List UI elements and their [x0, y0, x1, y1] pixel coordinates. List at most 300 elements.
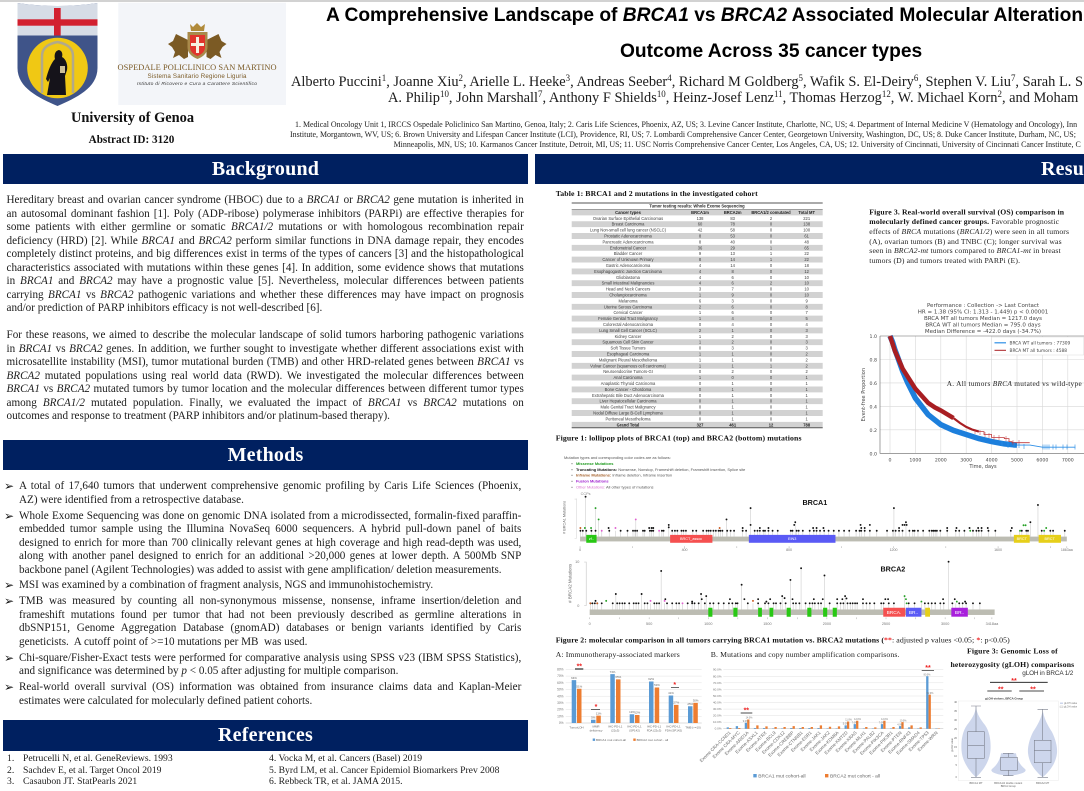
category labels: Exome-ATRX — [745, 730, 768, 753]
table: BRCA mutations by cancer type: 3 — [699, 287, 702, 292]
table: BRCA mutations by cancer type: 78 — [730, 222, 736, 227]
category labels: Exome-ESR1 — [790, 730, 813, 753]
bullet list: methods: estimates were calculated for molecularly defined patient cohorts. — [19, 695, 312, 707]
category labels: Exome-WRN — [917, 730, 939, 752]
chart: mutations and copy number amplification — [699, 665, 943, 780]
table: BRCA mutations by cancer type: 1 — [806, 393, 809, 398]
logo: University of Genoa shield — [18, 3, 98, 106]
domains: BRCT — [1045, 537, 1055, 541]
chart: BRCA1 lollipop plot: 1863aa — [1061, 548, 1073, 552]
category labels: Exome-KDM6A — [814, 730, 840, 756]
table: BRCA mutations by cancer type: BRCA1/2 comutated — [751, 210, 791, 215]
value labels: 25% — [687, 702, 694, 706]
chart title: BRCA MT all tumors Median = 1217.0 days — [924, 316, 1042, 322]
legend: mutation types: Fusion Mutations — [576, 479, 609, 484]
table: BRCA mutations by cancer type: 2 — [732, 369, 735, 374]
table: BRCA mutations by cancer type: Pancreatic Adenocarcinoma — [603, 239, 654, 244]
table: BRCA mutations by cancer type: 61 — [804, 234, 810, 238]
axis labels — [861, 334, 1074, 470]
table: BRCA mutations by cancer type: 1 — [806, 381, 809, 386]
table: BRCA mutations by cancer type: 1 — [699, 292, 702, 298]
table: BRCA mutations by cancer type: 0 — [770, 298, 773, 303]
category labels: Exome-BCL9 — [754, 730, 777, 753]
y axis: 30% — [557, 701, 564, 705]
bullet list: methods: AZ) were identified from a retrospective database. — [19, 494, 244, 506]
figure 3 caption: overall survival: effects of BRCA mutations (BRCA1/2) were seen in all tumors — [869, 227, 1069, 236]
table: BRCA mutations by cancer type: 10 — [804, 281, 810, 286]
table: BRCA mutations by cancer type: 8 — [699, 239, 702, 244]
bullet list: methods: along with another panel designed to enrich for an additional >20,000 genes at lower depth. A 500Mb SNP — [19, 550, 521, 562]
heading: background: Background — [212, 158, 319, 180]
table: BRCA mutations by cancer type: Nodal Diffuse Large B-Cell Lymphoma — [593, 410, 664, 416]
chart: BRCA2 lollipop plot: 3000 — [941, 622, 949, 626]
table: BRCA mutations by cancer type: 14 — [730, 257, 736, 262]
stems — [580, 497, 1065, 537]
table: BRCA mutations by cancer type: 0 — [699, 399, 702, 404]
table: BRCA mutations by cancer type: 3 — [806, 334, 809, 339]
table: BRCA mutations by cancer type: 2 — [732, 340, 735, 345]
value labels: 13% — [629, 710, 635, 714]
table: BRCA mutations by cancer type: 1 — [806, 399, 809, 404]
value labels — [571, 670, 699, 719]
legend: mutation types: Other Mutations: All other types of mutations — [576, 485, 654, 490]
chart: BRCA2 lollipop plot: 3418aa — [986, 622, 999, 626]
chart: immunotherapy-associated markers — [557, 664, 702, 742]
table: BRCA mutations by cancer type: Kidney Cancer — [615, 334, 642, 339]
legend: mutation types: Missense Mutations — [576, 461, 614, 466]
table: BRCA mutations by cancer type: 1 — [732, 363, 735, 368]
table: BRCA mutations by cancer type: Soft Tissue Tumors — [610, 346, 646, 351]
chart B heading: B. Mutations and copy number amplification comparisons. — [711, 650, 899, 659]
panel: references — [3, 720, 528, 787]
category labels: Exome-RNF43 — [887, 730, 912, 755]
table: BRCA mutations by cancer type: 0 — [770, 352, 773, 356]
table: BRCA mutations by cancer type: 1 — [806, 387, 809, 392]
category labels: Exome-SMAD4 — [895, 730, 921, 756]
reference list: 1. — [7, 753, 14, 764]
table: BRCA mutations by cancer type: 1 — [732, 410, 735, 416]
chart: BRCA2 lollipop plot: 0 — [577, 604, 579, 608]
table: BRCA mutations by cancer type: 1 — [806, 410, 809, 416]
chart legend — [1060, 702, 1078, 708]
figure 3 caption: overall survival: Figure 3. Real-world overall survival (OS) comparison in — [869, 208, 1065, 217]
axis labels: 0.4 — [870, 404, 877, 410]
table: BRCA mutations by cancer type: 0 — [770, 381, 773, 386]
axis labels: 40 — [954, 700, 958, 704]
chart: immunotherapy-associated markers: * — [673, 682, 676, 689]
value labels: 5% — [591, 715, 596, 719]
table: BRCA mutations by cancer type: 1 — [732, 357, 735, 362]
title line 1: A Comprehensive Landscape of BRCA1 vs BRCA2 Associated Molecular Alteration — [326, 5, 1083, 26]
table: BRCA mutations by cancer type: 10 — [804, 292, 810, 298]
value labels: 12.0% — [854, 718, 862, 721]
table: BRCA mutations by cancer type: 42 — [698, 228, 703, 233]
chart legend: gLOH value — [1064, 702, 1078, 705]
table: BRCA mutations by cancer type: 1 — [732, 381, 735, 386]
table: BRCA mutations by cancer type: 0 — [770, 222, 773, 227]
y axis: 50.0% — [713, 694, 722, 698]
value labels: 11% — [596, 711, 602, 715]
table: BRCA mutations by cancer type: Small Intestinal Malignancies — [602, 281, 654, 286]
category labels: TumorLOH — [569, 726, 584, 730]
table: BRCA mutations by cancer type: 3 — [806, 340, 809, 345]
table: BRCA mutations by cancer type: 2 — [770, 216, 773, 221]
category labels: Exome-ASXL1 — [734, 730, 759, 755]
chart title — [918, 303, 1048, 335]
abstract id: Abstract ID: 3120 — [89, 134, 174, 146]
table: BRCA mutations by cancer type: 29 — [730, 245, 736, 250]
reference list: 6. Rebbeck TR, et al. JAMA 2015. — [269, 776, 402, 787]
table: BRCA mutations by cancer type: Bone Cancer - Chordoma — [605, 387, 652, 392]
stems — [590, 562, 980, 609]
table: BRCA mutations by cancer type: Liver Hepatocellular Carcinoma — [599, 399, 657, 404]
value labels: 12% — [634, 711, 641, 715]
axis labels: BRCA1 MT — [969, 781, 983, 785]
table: BRCA mutations by cancer type: 0 — [699, 369, 702, 374]
bullet list: methods: A total of 17,640 tumors that underwent comprehensive genomic profiling by Caris Life Sciences (Phoenix, — [19, 480, 521, 492]
table: BRCA mutations by cancer type: Anaplastic Thyroid Carcinoma — [601, 381, 656, 386]
axis labels: 1000 — [909, 458, 921, 464]
text block: background paragraph 1: deficiency (HRD) [2]. While BRCA1 and BRCA2 perform similar functions in DNA damage repair, they encodes — [6, 235, 524, 247]
bullet list: methods: TMB was measured by counting all non-synonymous missense, nonsense, inframe insertion/deletion and — [19, 595, 521, 607]
y axis: 60% — [557, 681, 564, 685]
table: BRCA mutations by cancer type: Head and Neck Cancers — [606, 287, 650, 292]
figure 1 title: Figure 1: lollipop plots of BRCA1 (top) and BRCA2 (bottom) mutations — [556, 433, 802, 442]
table: BRCA mutations by cancer type: 6 — [732, 281, 735, 286]
value labels: 65% — [615, 675, 622, 679]
table: BRCA mutations by cancer type: 138 — [803, 222, 811, 227]
heading: background — [3, 154, 528, 184]
domains — [708, 608, 968, 617]
text block: background paragraph 2: in BRCA1 vs BRCA2 genes. In addition, we further sought to investigate whether different associations exist with — [6, 343, 524, 355]
category labels: IHC-PD-L1 — [608, 724, 623, 728]
y axis: 90.0% — [713, 668, 722, 672]
y axis: 60.0% — [713, 687, 722, 691]
figure 2 title: Figure 2: molecular comparison in all tumors carrying BRCA1 mutation vs. BRCA2 mutations (**: adjusted p values <0.05; *: p<0.05) — [556, 636, 1010, 644]
affiliations line 1: 1. Medical Oncology Unit 1, IRCCS Ospedale Policlinico San Martino, Genoa, Italy; 2. Caris Life Sciences, Phoenix, AZ, US; 3. Levine Cancer Institute, Charlotte, NC, US; 4. Department of Internal Medicine V (Hematology and Oncology), Inn — [295, 120, 1077, 129]
heading: references — [3, 720, 528, 751]
axis labels: 20 — [954, 736, 958, 740]
table: BRCA mutations by cancer type: 2 — [732, 334, 735, 339]
chart: gLOH violin plot — [950, 670, 1078, 788]
table: BRCA mutations by cancer type: 3 — [732, 298, 735, 303]
value labels: 41% — [668, 691, 674, 695]
axis labels: 3000 — [960, 458, 972, 464]
table: BRCA mutations by cancer type: 0 — [699, 405, 702, 410]
curve: BRCA MT — [890, 336, 954, 418]
chart: gLOH violin plot: ** — [1011, 678, 1017, 685]
category labels: (22c3) — [611, 729, 619, 733]
bullet list: methods: designed to enrich for more than 700 clinically relevant genes at high coverage and high read-depth was used, — [19, 537, 521, 549]
bullet list: methods: ➢ — [4, 578, 14, 592]
value labels — [743, 673, 934, 726]
table: BRCA mutations by cancer type: 1 — [732, 352, 735, 356]
icon: griffons and coat of arms — [168, 23, 226, 59]
chart: BRCA1 lollipop plot: 1600 — [994, 548, 1002, 552]
value labels: 30% — [693, 699, 699, 703]
table: BRCA mutations by cancer type: Esophageal Carcinoma — [607, 352, 650, 356]
reference list: Petrucelli N, et al. GeneReviews. 1993 — [23, 753, 173, 764]
y axis: 0% — [559, 721, 564, 725]
table: BRCA mutations by cancer type: 0 — [770, 357, 773, 362]
table: BRCA mutations by cancer type: 4 — [732, 316, 735, 321]
chart legend: BRCA2 mut cohort - all — [637, 738, 669, 742]
table: BRCA mutations by cancer type: 1 — [732, 405, 735, 410]
table: BRCA mutations by cancer type: Peritoneal Mesothelioma — [605, 416, 651, 421]
axis labels: 0.2 — [870, 428, 877, 434]
category labels: Exome-JAK1 — [800, 730, 822, 752]
category labels: Exome-MLH1 — [844, 730, 867, 753]
chart: BRCA2 lollipop plot: 500 — [646, 622, 652, 626]
legend: mutation types: Mutation types and corresponding color codes are as follows: — [564, 455, 671, 460]
bullet list: methods: ➢ — [4, 651, 14, 665]
value labels: 64% — [571, 676, 577, 680]
table: BRCA mutations by cancer type: 3 — [732, 346, 735, 351]
table: BRCA mutations by cancer type: 58 — [730, 228, 736, 233]
domains: BR.. — [955, 610, 964, 616]
table: BRCA mutations by cancer type: Lung Non-small cell lung cancer (NSCLC) — [590, 228, 667, 233]
table: BRCA mutations by cancer type: 0 — [770, 393, 773, 398]
value labels: 14.0% — [746, 717, 753, 720]
axis labels: 7000 — [1062, 458, 1074, 464]
table: BRCA mutations by cancer type: 22 — [804, 257, 810, 262]
table: BRCA mutations by cancer type: 461 — [729, 422, 737, 427]
chart: BRCA1 lollipop plot: 400 — [682, 548, 688, 552]
y axis: 40.0% — [713, 700, 722, 704]
value labels: 7.0% — [879, 721, 885, 724]
y axis: 80% — [557, 668, 564, 672]
domains — [586, 535, 1061, 543]
chart: Kaplan-Meier overall survival, all tumors — [861, 303, 1084, 470]
table: BRCA mutations by cancer type: 0 — [770, 234, 773, 238]
violin: BRCA1 MT — [961, 706, 991, 777]
chart: BRCA1 lollipop plot: CCPs — [581, 492, 591, 496]
table: BRCA mutations by cancer type: 8 — [699, 257, 702, 262]
text block: background paragraph 1: completely distinct proteins, and big differences exist in terms of the types of cancers [3] and the histopathological — [6, 248, 524, 260]
chart title: Median Difference = -422.0 days (-34.7%) — [925, 329, 1041, 335]
category labels — [699, 730, 939, 763]
category labels — [569, 724, 701, 733]
legend: mutation types: Inframe Mutations: Inframe deletion, Inframe insertion — [576, 473, 672, 478]
BRCA1 bars — [572, 674, 692, 723]
heading: methods: Methods — [228, 444, 303, 466]
table: BRCA mutations by cancer type: 0 — [770, 228, 773, 233]
affiliations line 2: Institute, Morgantown, WV, US; 6. Brown University and Lifespan Cancer Institute (LCI), Providence, RI, US; 7. Lombardi Comprehensive Cancer Center, Georgetown University, Washington, DC, US; 8. Duke Cancer Institute, Durham, NC, US; — [290, 130, 1076, 139]
table: BRCA mutations by cancer type: 4 — [806, 322, 809, 327]
table: BRCA mutations by cancer type: 0 — [770, 375, 773, 380]
figure 3 caption: overall survival: seen in BRCA2-mt tumors compared to BRCA1-mt in breast — [869, 246, 1061, 255]
table: BRCA mutations by cancer type: 8 — [732, 269, 735, 274]
table: BRCA mutations by cancer type: 1 — [699, 375, 702, 380]
table: BRCA mutations by cancer type: Cervical Cancer — [613, 310, 643, 315]
axis — [590, 617, 992, 619]
table: BRCA mutations by cancer type: Glioblastoma — [616, 275, 641, 280]
table: BRCA mutations by cancer type: 36 — [698, 245, 703, 250]
table: BRCA mutations by cancer type: 0 — [770, 269, 773, 274]
dots — [590, 562, 980, 603]
chart title: BRCA2: BRCA2 — [880, 565, 905, 574]
figure 3 caption: overall survival: (A), ovarian tumors (B) and TNBC (C); longer survival was — [869, 237, 1062, 246]
bullet list: methods: Chi-square/Fisher-Exact tests were performed for comparative analysis using SPSS v23 (IBM SPSS Statistics), — [19, 652, 521, 664]
table: BRCA mutations by cancer type: 8 — [699, 234, 702, 238]
chart: BRCA1 lollipop plot — [563, 492, 1073, 552]
category labels: FDA (22c3) — [647, 729, 661, 733]
value labels: 5.0% — [843, 723, 849, 726]
table: BRCA mutations by cancer type: Male Genital Tract Malignancy — [600, 405, 656, 410]
table title: Table 1: BRCA1 and 2 mutations in the investigated cohort — [556, 189, 758, 198]
table: BRCA mutations by cancer type: Neuroendocrine Tumors-GI — [603, 369, 653, 374]
text block: background paragraph 1: characteristics associated with mutations within these genes [4]. In addition, some evidence shows that mutations — [6, 262, 524, 274]
table: BRCA mutations by cancer type: 12 — [804, 269, 810, 274]
table: BRCA mutations by cancer type: 1 — [732, 387, 735, 392]
table: BRCA mutations by cancer type: 0 — [770, 410, 773, 416]
table: BRCA mutations by cancer type: BRCA1m — [691, 210, 709, 215]
table: BRCA mutations by cancer type: 3 — [806, 328, 809, 333]
table: BRCA mutations by cancer type: 1 — [770, 363, 773, 368]
table: BRCA mutations by cancer type: Total MT — [798, 210, 815, 215]
table: BRCA mutations by cancer type: 6 — [732, 275, 735, 280]
reference list: 2. — [7, 765, 14, 776]
table: BRCA mutations by cancer type: 0 — [699, 381, 702, 386]
value labels: 7.0% — [852, 721, 858, 724]
table: BRCA mutations by cancer type: 0 — [699, 393, 702, 398]
affiliations line 3: Minneapolis, MN, US; 10. Karmanos Cancer Institute, Detroit, MI, US; 11. USC Norris Comprehensive Cancer Center, Los Angeles, CA, US; 12. University of Cincinnati, University of Cincinnati Cancer Institute, C — [394, 140, 1081, 149]
table: BRCA mutations by cancer type: Melanoma — [618, 298, 638, 303]
table: BRCA mutations by cancer type: 1 — [732, 393, 735, 398]
axis — [580, 546, 1067, 548]
chart legend — [753, 774, 880, 780]
table: BRCA mutations by cancer type: 60 — [698, 222, 703, 227]
category labels: deficiency — [590, 729, 603, 733]
table: BRCA mutations by cancer type: 1 — [699, 340, 702, 345]
table: BRCA mutations by cancer type: 3 — [806, 346, 809, 351]
table: BRCA mutations by cancer type: Breast Carcinoma — [612, 222, 645, 227]
table: BRCA mutations by cancer type: 0 — [770, 316, 773, 321]
text block: background paragraph 1: carrying BRCA1 vs BRCA2 pathogenic variations and whether these differences may have impact on prognosis — [6, 289, 524, 301]
legend: mutation types: Truncating Mutations: Nonsense, Nonstop, Frameshift deletion, Frameshift insertion, Splice site — [576, 467, 746, 472]
chart legend: gLOH value — [1064, 706, 1078, 708]
category labels: Exome-PIK3CA — [859, 730, 885, 756]
legend: mutation types — [564, 455, 746, 490]
axis labels: 0.8 — [870, 358, 877, 364]
text block: background paragraph 2: BRCA1 vs BRCA2 mutated tumors by tumor location and the molecular differences between different tumor types — [6, 383, 524, 395]
table: BRCA mutations by cancer type: 1 — [806, 416, 809, 421]
significance markers — [575, 668, 583, 670]
table: BRCA mutations by cancer type: 1 — [732, 416, 735, 421]
table: BRCA mutations by cancer type: 1 — [699, 352, 702, 356]
significance markers — [741, 670, 934, 713]
chart legend: BRCA1 mut cohort-all — [596, 738, 626, 742]
table: BRCA mutations by cancer type: 13 — [730, 251, 736, 256]
table: BRCA mutations by cancer type: 0 — [770, 369, 773, 374]
axis labels: 6000 — [1036, 458, 1048, 464]
axis labels — [950, 700, 1050, 788]
category labels: Exome-JAK2 — [809, 730, 831, 752]
table: BRCA mutations by cancer type: 10 — [804, 275, 810, 280]
chart: BRCA2 lollipop plot: 1000 — [704, 622, 712, 626]
reference list — [7, 753, 500, 787]
domains: EIN3 — [788, 537, 796, 541]
chart: BRCA2 lollipop plot: 1500 — [763, 622, 772, 626]
chart: BRCA2 lollipop plot — [567, 560, 999, 626]
text block: background paragraph 1: Hereditary breast and ovarian cancer syndrome (HBOC) due to a BRCA1 or BRCA2 gene mutation is inherited in — [6, 194, 524, 206]
table: BRCA mutations by cancer type: Cholangiocarcinoma — [609, 292, 647, 298]
table: BRCA mutations by cancer type: 1 — [699, 357, 702, 362]
table: BRCA mutations by cancer type: 0 — [770, 334, 773, 339]
value labels: 52.0% — [927, 692, 934, 695]
table: BRCA mutations by cancer type: 100 — [803, 228, 811, 233]
axis labels: 10 — [954, 754, 958, 758]
protein track — [590, 609, 995, 615]
chart: BRCA1 lollipop plot: 0 — [579, 548, 581, 552]
text block: background paragraph 2: BRCA2 mutated populations using real world data (RWD). We investigated the molecular differences between — [6, 370, 524, 382]
table: BRCA mutations by cancer type: 1 — [699, 334, 702, 339]
table: BRCA mutations by cancer type: 2 — [770, 281, 773, 286]
text block: background paragraph 2: outcomes and response to treatment (PARP inhibitors and/or platinum-based therapy). — [6, 410, 390, 422]
violin: BRCA2 MT — [1028, 709, 1057, 777]
category labels: Exome CRA-MYC — [712, 730, 741, 759]
bullet list: methods: dbSNP151, Genome Aggregation Database (gnomAD) databases or benign variants identified by Caris — [19, 622, 521, 634]
axis labels: Event-free Proportion — [861, 368, 867, 421]
chart annotation: A. All tumors BRCA mutated vs wild-type — [947, 379, 1082, 388]
table: BRCA mutations by cancer type: 0 — [699, 322, 702, 327]
domains: BRCA. — [887, 610, 901, 616]
table: BRCA mutations by cancer type: Colorectal Adenocarcinoma — [603, 322, 654, 327]
heading: methods — [3, 440, 528, 470]
table: BRCA mutations by cancer type: Endometrial Cancer — [610, 245, 647, 250]
category labels: Exome-CTNNB1 — [776, 730, 804, 757]
value labels: 10.0% — [900, 719, 907, 722]
bullet list: methods: geneticists. A cutoff point of >=10 mutations per MB was used. — [19, 636, 307, 648]
table: BRCA mutations by cancer type: Female Genital Tract Malignancy — [598, 316, 659, 321]
table: BRCA mutations by cancer type: 65 — [804, 245, 810, 250]
table: BRCA mutations by cancer type: 0 — [699, 416, 702, 421]
y axis: 40% — [557, 694, 564, 698]
table: BRCA mutations by cancer type: 1 — [699, 310, 702, 315]
value labels: 51% — [576, 684, 583, 688]
chart: gLOH violin plot: ** — [1030, 687, 1036, 694]
axis labels: Time, days — [968, 464, 997, 470]
chart: mutations and copy number amplification: ** — [925, 665, 931, 672]
table: BRCA mutations by cancer type: 1 — [806, 375, 809, 380]
table: BRCA mutations by cancer type: 5 — [806, 316, 809, 321]
hospital subtitle: Sistema Sanitario Regione Liguria — [148, 73, 247, 80]
category labels: Exome-CREBBP — [767, 730, 795, 758]
text block: background paragraph 1: some patients with either germline or somatic BRCA1/2 mutations or with homologous recombination repair — [6, 221, 524, 233]
table: BRCA mutations by cancer type: 14 — [730, 263, 736, 268]
table: BRCA mutations by cancer type: 2 — [806, 363, 809, 368]
table: BRCA mutations by cancer type: 0 — [770, 387, 773, 392]
category labels: Exome CRA-CCND1 — [699, 730, 732, 763]
table: BRCA mutations by cancer type: 7 — [806, 310, 809, 315]
table: BRCA mutations by cancer type: 6 — [699, 298, 702, 303]
reference list: 4. Vocka M, et al. Cancers (Basel) 2019 — [269, 753, 422, 764]
table: BRCA mutations by cancer type: 0 — [770, 239, 773, 244]
header: title, authors and affiliations — [0, 0, 1084, 149]
table: BRCA mutations by cancer type: 2 — [699, 304, 702, 309]
axis labels: 1.0 — [870, 334, 877, 340]
category labels: MMR — [593, 724, 599, 728]
table: BRCA mutations by cancer type: 1 — [699, 316, 702, 321]
category labels: Exome-CDK12 — [761, 730, 786, 755]
category labels: Exome-PALB2 — [852, 730, 876, 754]
table: BRCA mutations by cancer type: 138 — [697, 216, 704, 221]
table: BRCA mutations by cancer type: 0 — [699, 346, 702, 351]
bullet list: methods — [4, 479, 522, 707]
hospital name: OSPEDALE POLICLINICO SAN MARTINO — [118, 63, 276, 72]
table: BRCA mutations by cancer type: 1 — [770, 251, 773, 256]
table: BRCA mutations by cancer type: 4 — [699, 281, 702, 286]
